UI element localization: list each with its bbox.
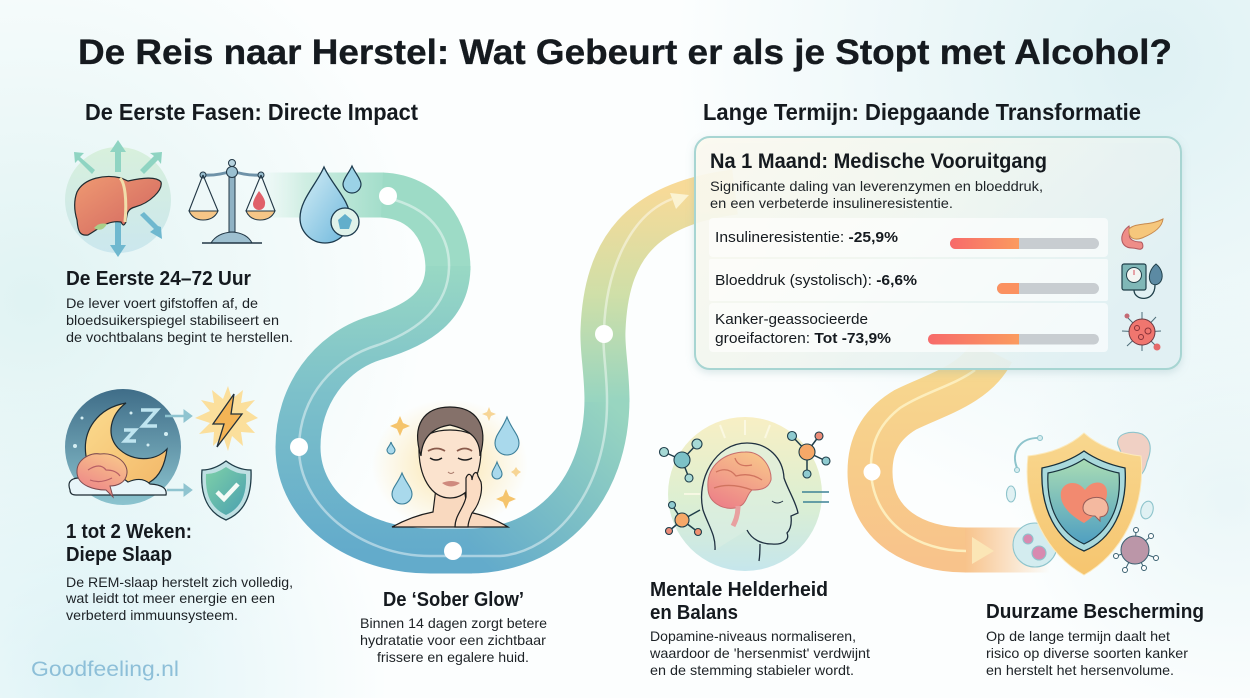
text: first 24-72 hours: De Eerste 24–72 Uur [66, 268, 251, 290]
text: 1 to 2 weeks: Diepe Slaap [66, 544, 172, 566]
text: mental clarity: Mentale Helderheid [650, 579, 828, 601]
card heading: Na 1 Maand: Medische Vooruitgang [710, 150, 1047, 173]
text: sober glow: hydratatie voor een zichtbaar [360, 632, 546, 648]
watermark: Goodfeeling.nl [31, 657, 179, 681]
text: 1 to 2 weeks [65, 521, 293, 623]
icon: moon and brain sleep [65, 389, 192, 505]
text: sober glow [360, 589, 547, 665]
text: mental clarity: waardoor de 'hersenmist' verdwijnt [649, 645, 870, 661]
icon: woman with glowing skin [372, 399, 528, 531]
text: mental clarity: en Balans [650, 602, 738, 624]
text: first 24-72 hours: bloedsuikerspiegel stabiliseert en [66, 312, 279, 328]
text: lasting protection: Duurzame Bescherming [986, 601, 1204, 623]
text: mental clarity: en de stemming stabieler wordt. [650, 662, 854, 678]
icon: energy bolt [195, 386, 258, 451]
text: lasting protection: en herstelt het hersenvolume. [986, 662, 1174, 678]
row: insulin resistance [715, 229, 1099, 249]
arrow: yellow ribbon [670, 193, 689, 209]
icon: balance scale [189, 160, 275, 243]
text: sober glow: De ‘Sober Glow’ [383, 589, 524, 611]
heading: left section: De Eerste Fasen: Directe Impact [85, 99, 418, 125]
text: lasting protection: Op de lange termijn daalt het [986, 628, 1170, 644]
text: first 24-72 hours [66, 268, 293, 345]
icon: pancreas [1122, 219, 1163, 249]
text: 1 to 2 weeks: 1 tot 2 Weken: [66, 521, 192, 543]
text: mental clarity [649, 579, 870, 678]
row: blood pressure: Bloeddruk (systolisch): -6,6% [715, 272, 917, 289]
row: cancer growth factors: groeifactoren: Tot -73,9% [715, 330, 891, 347]
icon: protective shield with cells [1006, 432, 1158, 575]
icon: green shield [202, 461, 251, 520]
card description: Significante daling van leverenzymen en bloeddruk, [710, 178, 1043, 194]
path: blue-green to yellow ribbon [258, 192, 735, 556]
icon: water drops [300, 166, 361, 243]
card description: en een verbeterde insulineresistentie. [710, 195, 953, 211]
text: 1 to 2 weeks: De REM-slaap herstelt zich volledig, [66, 574, 293, 590]
row: blood pressure [715, 272, 1099, 294]
waypoints [290, 187, 880, 560]
path: orange ribbon [870, 352, 1050, 564]
card description [710, 178, 1043, 211]
text: first 24-72 hours: de vochtbalans begint te herstellen. [66, 329, 293, 345]
icon: head with brain and molecules [660, 417, 830, 571]
row: cancer growth factors: Kanker-geassocieerde [715, 311, 868, 328]
text: lasting protection: risico op diverse soorten kanker [986, 645, 1188, 661]
text: 1 to 2 weeks: wat leidt tot meer energie en een [65, 590, 275, 606]
panel: one month medical progress [695, 137, 1181, 369]
heading: right section: Lange Termijn: Diepgaande Transformatie [703, 99, 1141, 125]
text: mental clarity: Dopamine-niveaus normaliseren, [650, 628, 856, 644]
text: sober glow: Binnen 14 dagen zorgt betere [360, 615, 547, 631]
row backgrounds [709, 218, 1108, 352]
icon: liver with arrows [65, 140, 171, 257]
text: sober glow: frissere en egalere huid. [377, 649, 529, 665]
row: cancer growth factors [715, 311, 1099, 347]
text: lasting protection [986, 601, 1204, 678]
icon: blood pressure monitor [1122, 264, 1162, 298]
row: insulin resistance: Insulineresistentie: -25,9% [715, 229, 898, 246]
text: 1 to 2 weeks: verbeterd immuunsysteem. [66, 607, 238, 623]
title: De Reis naar Herstel: Wat Gebeurt er als je Stopt met Alcohol? [78, 32, 1172, 72]
icon: cancer cell [1122, 312, 1161, 351]
text: first 24-72 hours: De lever voert gifstoffen af, de [66, 295, 258, 311]
